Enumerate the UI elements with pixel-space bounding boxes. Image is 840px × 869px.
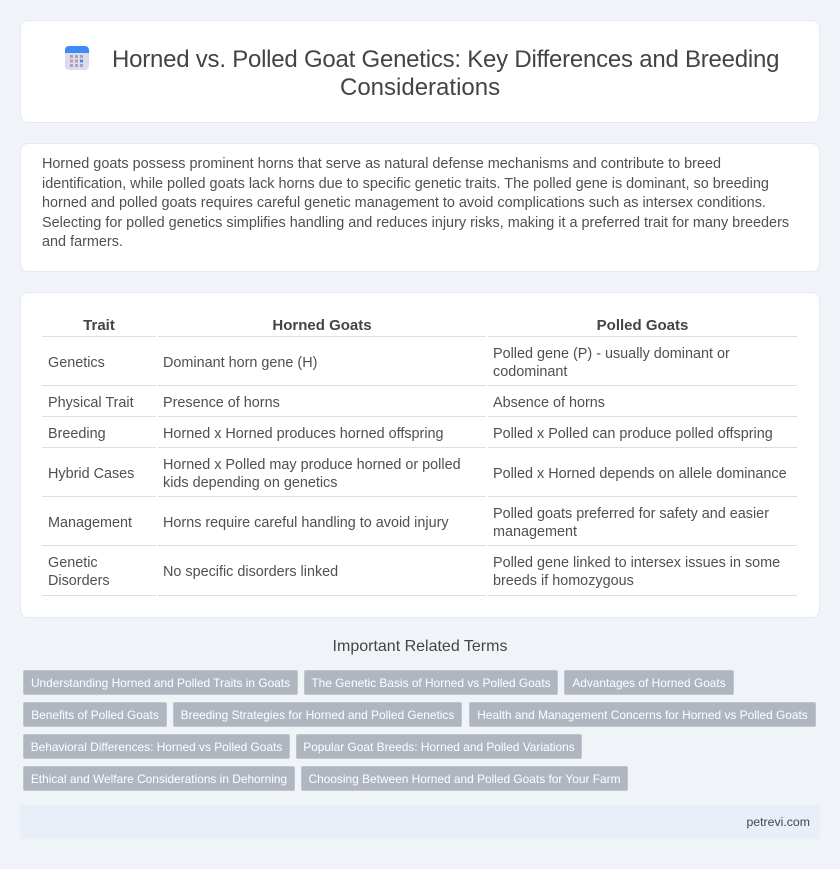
intro paragraph: horned and polled goats requires careful genetic management to avoid complications such as intersex conditions. (42, 195, 766, 211)
footer (20, 805, 820, 839)
title: Horned vs. Polled Goat Genetics: Key Differences and Breeding (112, 46, 779, 73)
row: hybrid cases: Horned x Polled may produce horned or polled (163, 457, 461, 473)
tag: Ethical and Welfare Considerations in Dehorning (31, 772, 287, 786)
table header: Polled Goats (597, 317, 688, 334)
icon: calendar (65, 46, 89, 70)
tag (23, 670, 298, 695)
row: breeding: Polled x Polled can produce polled offspring (493, 426, 773, 442)
tag (23, 702, 167, 727)
tag (296, 734, 582, 759)
tag (469, 702, 816, 727)
footer domain: petrevi.com (746, 815, 810, 829)
tag (301, 766, 628, 791)
intro paragraph: identification, while polled goats lack horns due to specific genetic traits. The polled gene is dominant, so breeding (42, 176, 769, 192)
related terms heading: Important Related Terms (333, 638, 507, 655)
row: hybrid cases: Polled x Horned depends on allele dominance (493, 466, 787, 482)
row: genetics: Dominant horn gene (H) (163, 355, 317, 371)
row: management: Horns require careful handling to avoid injury (163, 515, 449, 531)
tag: Health and Management Concerns for Horned vs Polled Goats (477, 708, 808, 722)
comparison table panel (20, 292, 820, 618)
row: physical trait (42, 395, 797, 417)
header card (20, 20, 820, 123)
row: breeding: Breeding (48, 426, 106, 442)
row: breeding: Horned x Horned produces horned offspring (163, 426, 444, 442)
title (112, 46, 779, 101)
row: breeding (42, 426, 797, 448)
intro text panel (20, 143, 820, 272)
tag: Behavioral Differences: Horned vs Polled Goats (31, 740, 282, 754)
table header: Trait (83, 317, 115, 334)
row: genetics: Genetics (48, 355, 105, 371)
row: genetic disorders: Polled gene linked to intersex issues in some (493, 555, 780, 571)
table header: Horned Goats (272, 317, 372, 334)
row: genetic disorders (42, 555, 797, 596)
tag (564, 670, 734, 695)
row: genetic disorders: Disorders (48, 573, 110, 589)
row: hybrid cases: Hybrid Cases (48, 466, 134, 482)
row: genetics (42, 346, 797, 386)
row: physical trait: Physical Trait (48, 395, 134, 411)
related terms tags (23, 670, 816, 791)
tag: Popular Goat Breeds: Horned and Polled Variations (303, 740, 575, 754)
intro paragraph: and farmers. (42, 234, 123, 250)
row: management (42, 506, 797, 546)
table header (42, 317, 797, 337)
tag (304, 670, 558, 695)
row: management: management (493, 524, 577, 540)
title: Considerations (340, 74, 500, 101)
row: genetic disorders: No specific disorders linked (163, 564, 338, 580)
tag: Understanding Horned and Polled Traits in Goats (31, 676, 290, 690)
tag (23, 734, 290, 759)
tag: Choosing Between Horned and Polled Goats for Your Farm (308, 772, 620, 786)
tag: Advantages of Horned Goats (572, 676, 726, 690)
row: genetic disorders: Genetic (48, 555, 98, 571)
intro paragraph: Selecting for polled genetics simplifies handling and reduces injury risks, making it a preferred trait for many breeders (42, 214, 789, 230)
tag (23, 766, 295, 791)
row: genetic disorders: breeds if homozygous (493, 573, 634, 589)
tag (173, 702, 462, 727)
tag: Breeding Strategies for Horned and Polled Genetics (181, 708, 454, 722)
tag: Benefits of Polled Goats (31, 708, 159, 722)
row: management: Polled goats preferred for safety and easier (493, 506, 769, 522)
row: hybrid cases (42, 457, 797, 497)
row: hybrid cases: kids depending on genetics (163, 475, 337, 491)
intro paragraph (42, 156, 789, 250)
row: genetics: codominant (493, 364, 567, 380)
intro paragraph: Horned goats possess prominent horns that serve as natural defense mechanisms and contribute to breed (42, 156, 721, 172)
row: physical trait: Absence of horns (493, 395, 605, 411)
row: management: Management (48, 515, 132, 531)
row: physical trait: Presence of horns (163, 395, 280, 411)
tag: The Genetic Basis of Horned vs Polled Goats (311, 676, 551, 690)
row: genetics: Polled gene (P) - usually dominant or (493, 346, 730, 362)
